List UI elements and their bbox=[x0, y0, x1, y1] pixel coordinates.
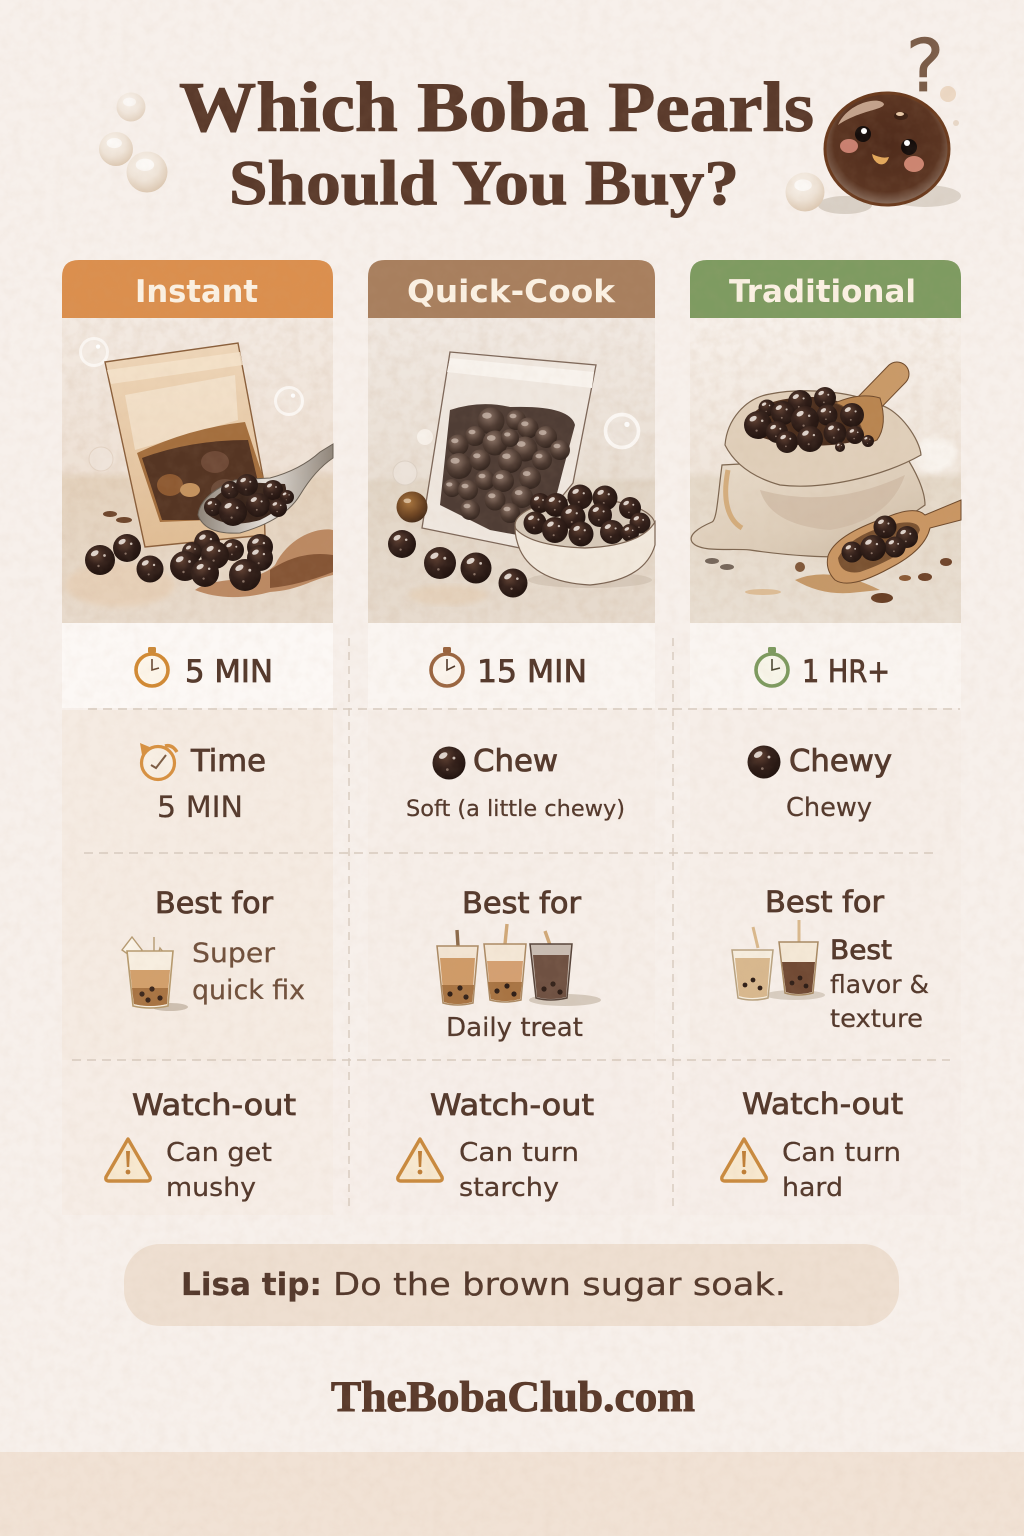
time row: 15 MIN bbox=[368, 623, 655, 708]
icon: stopwatch bbox=[431, 647, 463, 686]
panel: Instant column bbox=[62, 260, 333, 708]
title: Which Boba Pearls bbox=[179, 69, 814, 147]
comparison table background bbox=[62, 710, 961, 1215]
Chewy cell: Chewy bbox=[789, 744, 892, 779]
row: watch-out bbox=[106, 1087, 903, 1203]
Time cell: 5 MIN bbox=[157, 790, 243, 824]
Watch-out: quick-cook: starchy bbox=[459, 1173, 559, 1203]
Best for: instant: Best for bbox=[155, 886, 273, 920]
Watch-out: instant: Watch-out bbox=[132, 1088, 296, 1122]
icon: alarm timer bbox=[140, 743, 177, 780]
illustration: instant pearls pouch and spoon bbox=[62, 318, 333, 623]
Chewy cell bbox=[748, 744, 892, 823]
header: Instant: Instant bbox=[135, 274, 258, 310]
Best for: instant bbox=[122, 886, 305, 1011]
Time cell bbox=[140, 743, 266, 824]
Watch-out: quick-cook: Watch-out bbox=[430, 1088, 594, 1122]
header: Traditional bbox=[690, 260, 961, 318]
callout: Lisa tip: Do the brown sugar soak. bbox=[333, 1267, 786, 1303]
time row: 5 MIN: 5 MIN bbox=[185, 654, 273, 690]
website footer: TheBobaClub.com bbox=[331, 1374, 695, 1421]
illustration: quick-cook clear pouch and bowl bbox=[368, 318, 655, 623]
Watch-out: traditional: hard bbox=[782, 1173, 843, 1203]
Watch-out: quick-cook bbox=[398, 1088, 594, 1203]
callout: Lisa tip bbox=[124, 1244, 899, 1326]
Best for: traditional: Best bbox=[830, 935, 892, 966]
icon: warning triangle bbox=[398, 1139, 442, 1181]
Watch-out: traditional bbox=[722, 1087, 903, 1203]
row: chew and time bbox=[140, 743, 892, 824]
Best for: instant: quick fix bbox=[192, 975, 305, 1006]
title: Should You Buy? bbox=[229, 148, 739, 218]
time row: 1 HR+: 1 HR+ bbox=[802, 654, 890, 690]
decorative tapioca bubbles, left bbox=[99, 92, 168, 192]
Best for: traditional bbox=[732, 885, 929, 1033]
time row: 15 MIN: 15 MIN bbox=[477, 654, 587, 690]
Best for: instant: Super bbox=[192, 938, 276, 969]
icon: stopwatch bbox=[756, 647, 788, 686]
header: Quick-Cook bbox=[368, 260, 655, 318]
header: Quick-Cook: Quick-Cook bbox=[407, 274, 616, 310]
time row: 1 HR+ bbox=[690, 623, 961, 708]
Chew cell: Soft (a little chewy) bbox=[406, 797, 625, 822]
header: Instant bbox=[62, 260, 333, 318]
title bbox=[179, 69, 814, 218]
Chewy cell: Chewy bbox=[786, 793, 872, 823]
header: Traditional: Traditional bbox=[729, 274, 916, 310]
panel: Quick-Cook column bbox=[368, 260, 655, 708]
Best for: quick-cook: Daily treat bbox=[446, 1013, 583, 1043]
Watch-out: instant: mushy bbox=[166, 1173, 256, 1203]
icon: warning triangle bbox=[722, 1139, 766, 1181]
icon: stopwatch bbox=[136, 647, 168, 686]
Watch-out: instant: Can get bbox=[166, 1138, 272, 1168]
Best for: quick-cook bbox=[437, 886, 601, 1043]
time row: 5 MIN bbox=[62, 623, 333, 708]
icon: warning triangle bbox=[106, 1139, 150, 1181]
row: best for bbox=[122, 885, 929, 1043]
mascot: smiling boba pearl with question mark: ? bbox=[906, 24, 944, 108]
icon: cup with torn pouch bbox=[122, 937, 188, 1011]
Chew cell bbox=[406, 744, 625, 822]
footer band bbox=[0, 1452, 1024, 1536]
Best for: traditional: flavor & bbox=[830, 970, 929, 999]
Watch-out: instant bbox=[106, 1088, 296, 1203]
Watch-out: quick-cook: Can turn bbox=[459, 1138, 579, 1168]
Watch-out: traditional: Watch-out bbox=[742, 1087, 903, 1121]
Best for: traditional: texture bbox=[830, 1004, 923, 1033]
Best for: traditional: Best for bbox=[765, 885, 884, 919]
icon: two milk tea cups bbox=[732, 920, 825, 1000]
illustration: burlap sack of pearls and wooden scoops bbox=[690, 318, 961, 623]
Best for: quick-cook: Best for bbox=[462, 886, 581, 920]
Watch-out: traditional: Can turn bbox=[782, 1138, 901, 1168]
icon: three milk tea cups bbox=[437, 924, 601, 1006]
panel: Traditional column bbox=[690, 260, 961, 708]
mascot: smiling boba pearl with question mark bbox=[786, 24, 961, 214]
Time cell: Time bbox=[190, 744, 266, 779]
Chew cell: Chew bbox=[473, 744, 558, 779]
callout: Lisa tip: Lisa tip: bbox=[181, 1267, 322, 1303]
